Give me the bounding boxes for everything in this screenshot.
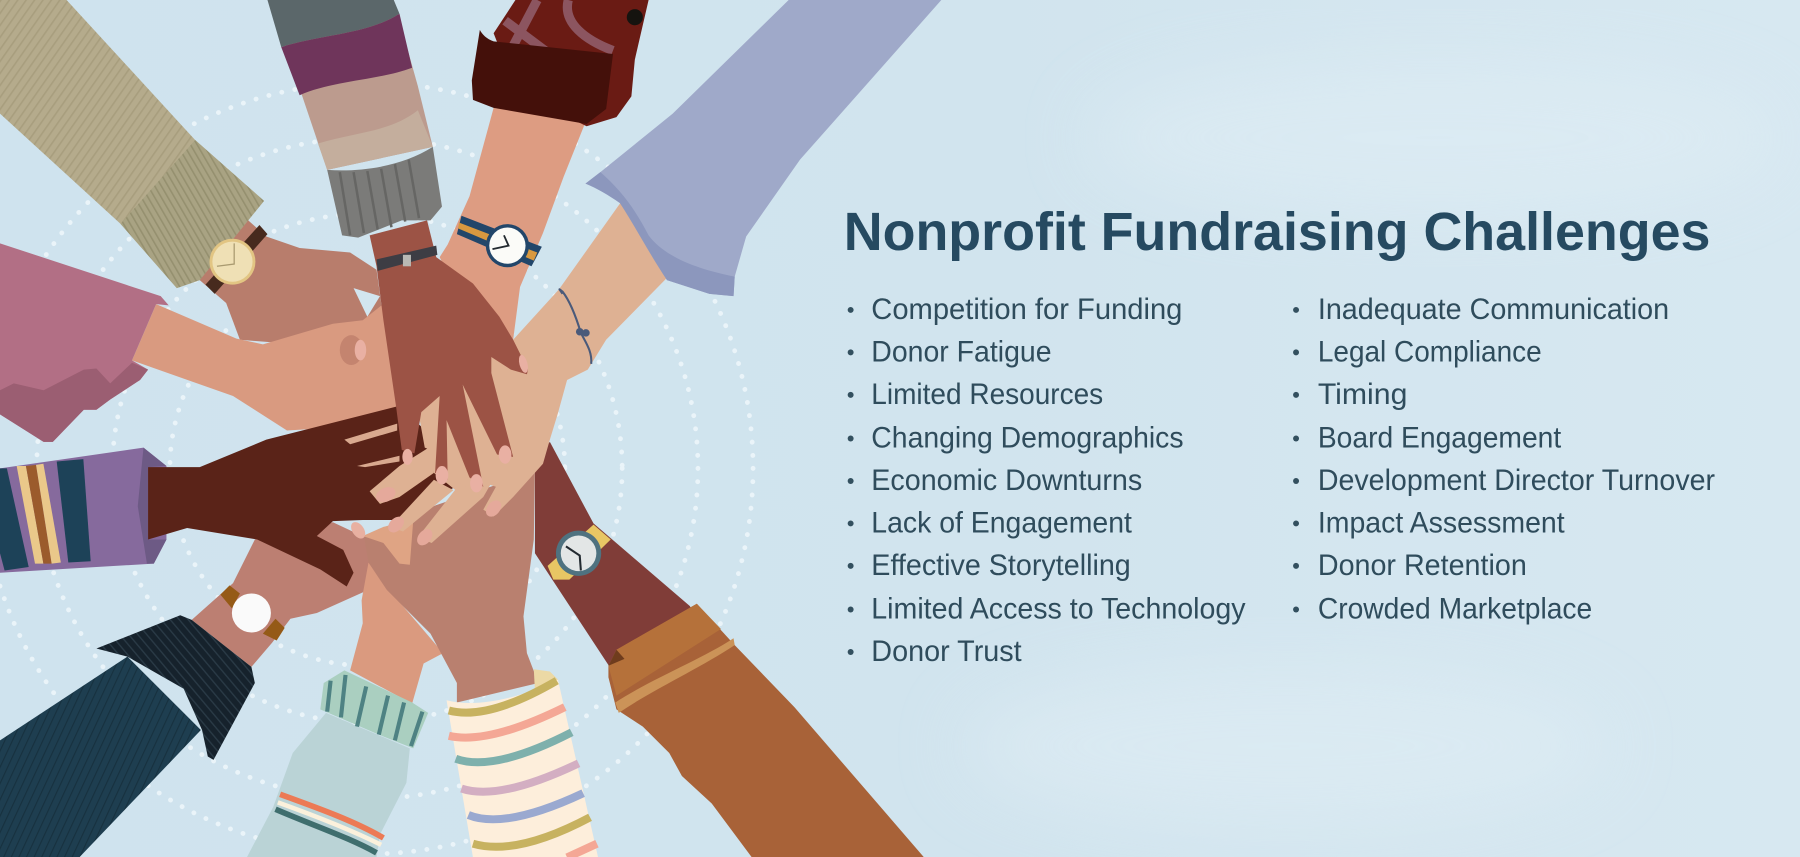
dotted concentric circles — [0, 83, 753, 854]
watch: white face brown strap — [220, 585, 285, 641]
arm: navy sleeve with mauve hand — [0, 522, 373, 857]
list column 1 — [848, 294, 1246, 668]
list column 2 — [1293, 294, 1715, 626]
sky gap between hands — [354, 288, 380, 317]
arm: purple sleeve with dark hand — [0, 406, 453, 587]
list column 1: Donor Fatigue — [871, 337, 1052, 369]
arm: striped sleeve with mauve hand — [364, 472, 598, 857]
arm: light tan hand — [370, 202, 673, 548]
watch: gold face — [205, 225, 267, 294]
arm: pink sleeve with peach hand — [0, 243, 404, 442]
list column 1: Competition for Funding — [871, 294, 1182, 326]
hand: peach finger patch — [348, 520, 413, 565]
list column 1: Effective Storytelling — [871, 550, 1131, 582]
list column 2: Timing — [1318, 379, 1407, 411]
list column 2: Legal Compliance — [1318, 337, 1542, 369]
arm: mint sleeve with peach hand — [247, 562, 443, 857]
list column 2: Board Engagement — [1318, 423, 1561, 455]
list column 2: Impact Assessment — [1318, 508, 1565, 540]
watch: yellow strap — [548, 525, 611, 580]
list column 1: Limited Resources — [871, 379, 1103, 411]
list column 1: Donor Trust — [871, 636, 1022, 668]
cuff: grey ribbed striped sleeve — [267, 0, 442, 238]
arm: dark mauve hand from top — [370, 220, 530, 492]
watch: navy rim — [457, 216, 542, 267]
list column 2: Development Director Turnover — [1318, 465, 1715, 497]
title: Nonprofit Fundraising Challenges — [844, 202, 1710, 262]
arm: dark brown with orange sleeve — [535, 442, 924, 857]
list column 1: Changing Demographics — [871, 423, 1184, 455]
bracelet: thin blue — [559, 289, 591, 364]
list column 1: Lack of Engagement — [871, 508, 1132, 540]
list column 2: Donor Retention — [1318, 550, 1527, 582]
list column 2: Crowded Marketplace — [1318, 594, 1592, 626]
list column 1: Economic Downturns — [871, 465, 1142, 497]
list column 2: Inadequate Communication — [1318, 294, 1669, 326]
illustration: stacked hands — [0, 0, 941, 857]
arm: khaki sleeve with hand — [0, 0, 385, 344]
arm: periwinkle sleeve — [585, 0, 941, 296]
list column 1: Limited Access to Technology — [871, 594, 1246, 626]
arm: peach with maroon shirt — [440, 0, 649, 344]
